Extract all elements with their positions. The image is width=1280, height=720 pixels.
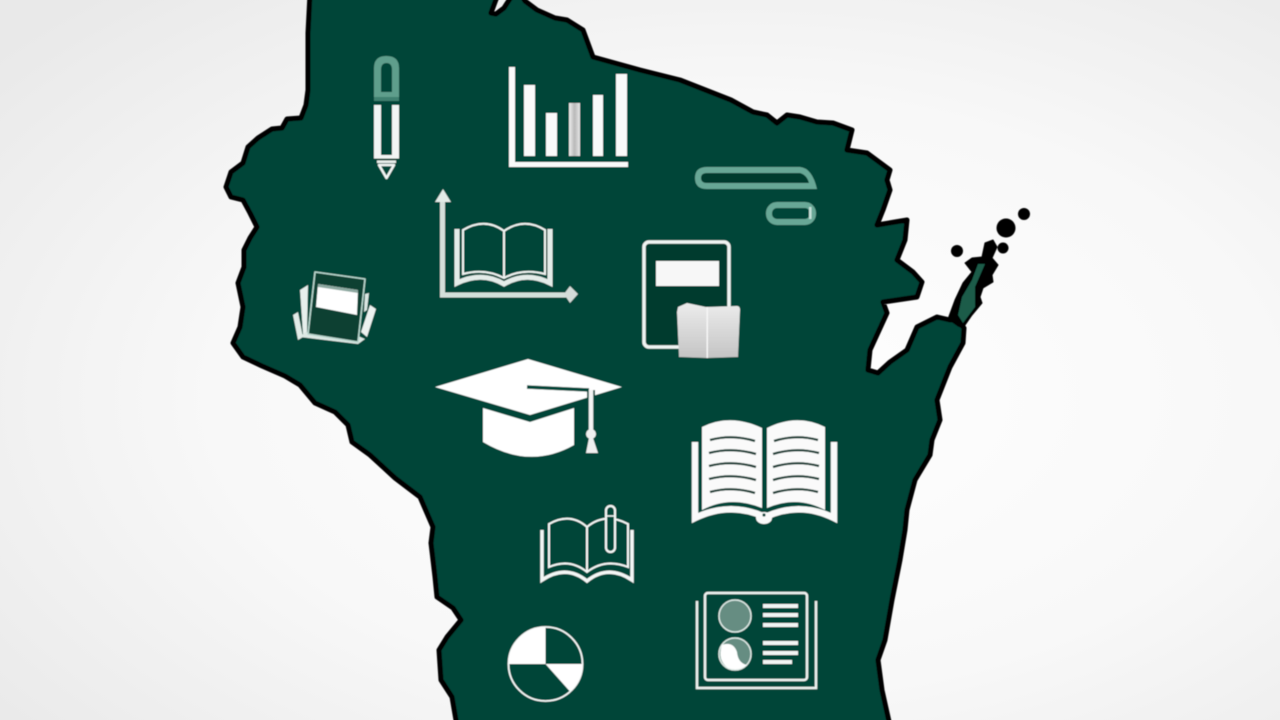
island: far <box>1018 208 1030 220</box>
icon: book on axes <box>435 189 578 303</box>
icon: pen <box>374 56 399 178</box>
icon: book with pen <box>542 506 632 581</box>
island: west <box>951 245 963 257</box>
map and icons layer <box>226 0 1030 720</box>
icon: tablet with open book <box>644 242 740 358</box>
icon: pie chart <box>508 627 582 701</box>
icon: short paperclip bar <box>769 205 813 222</box>
Door peninsula <box>948 240 998 328</box>
map of Wisconsin <box>226 0 1030 720</box>
icon: large open book <box>695 420 834 524</box>
state land shape <box>226 0 964 720</box>
icon: bar chart <box>509 67 628 167</box>
icon: long paperclip bar <box>695 167 817 189</box>
icon: graduation cap <box>435 359 622 457</box>
peninsula land strip <box>958 264 985 323</box>
island: large <box>996 218 1016 238</box>
island: middle <box>998 242 1008 254</box>
icon: notebook stack <box>293 272 376 344</box>
icon: report dashboard <box>697 593 816 688</box>
